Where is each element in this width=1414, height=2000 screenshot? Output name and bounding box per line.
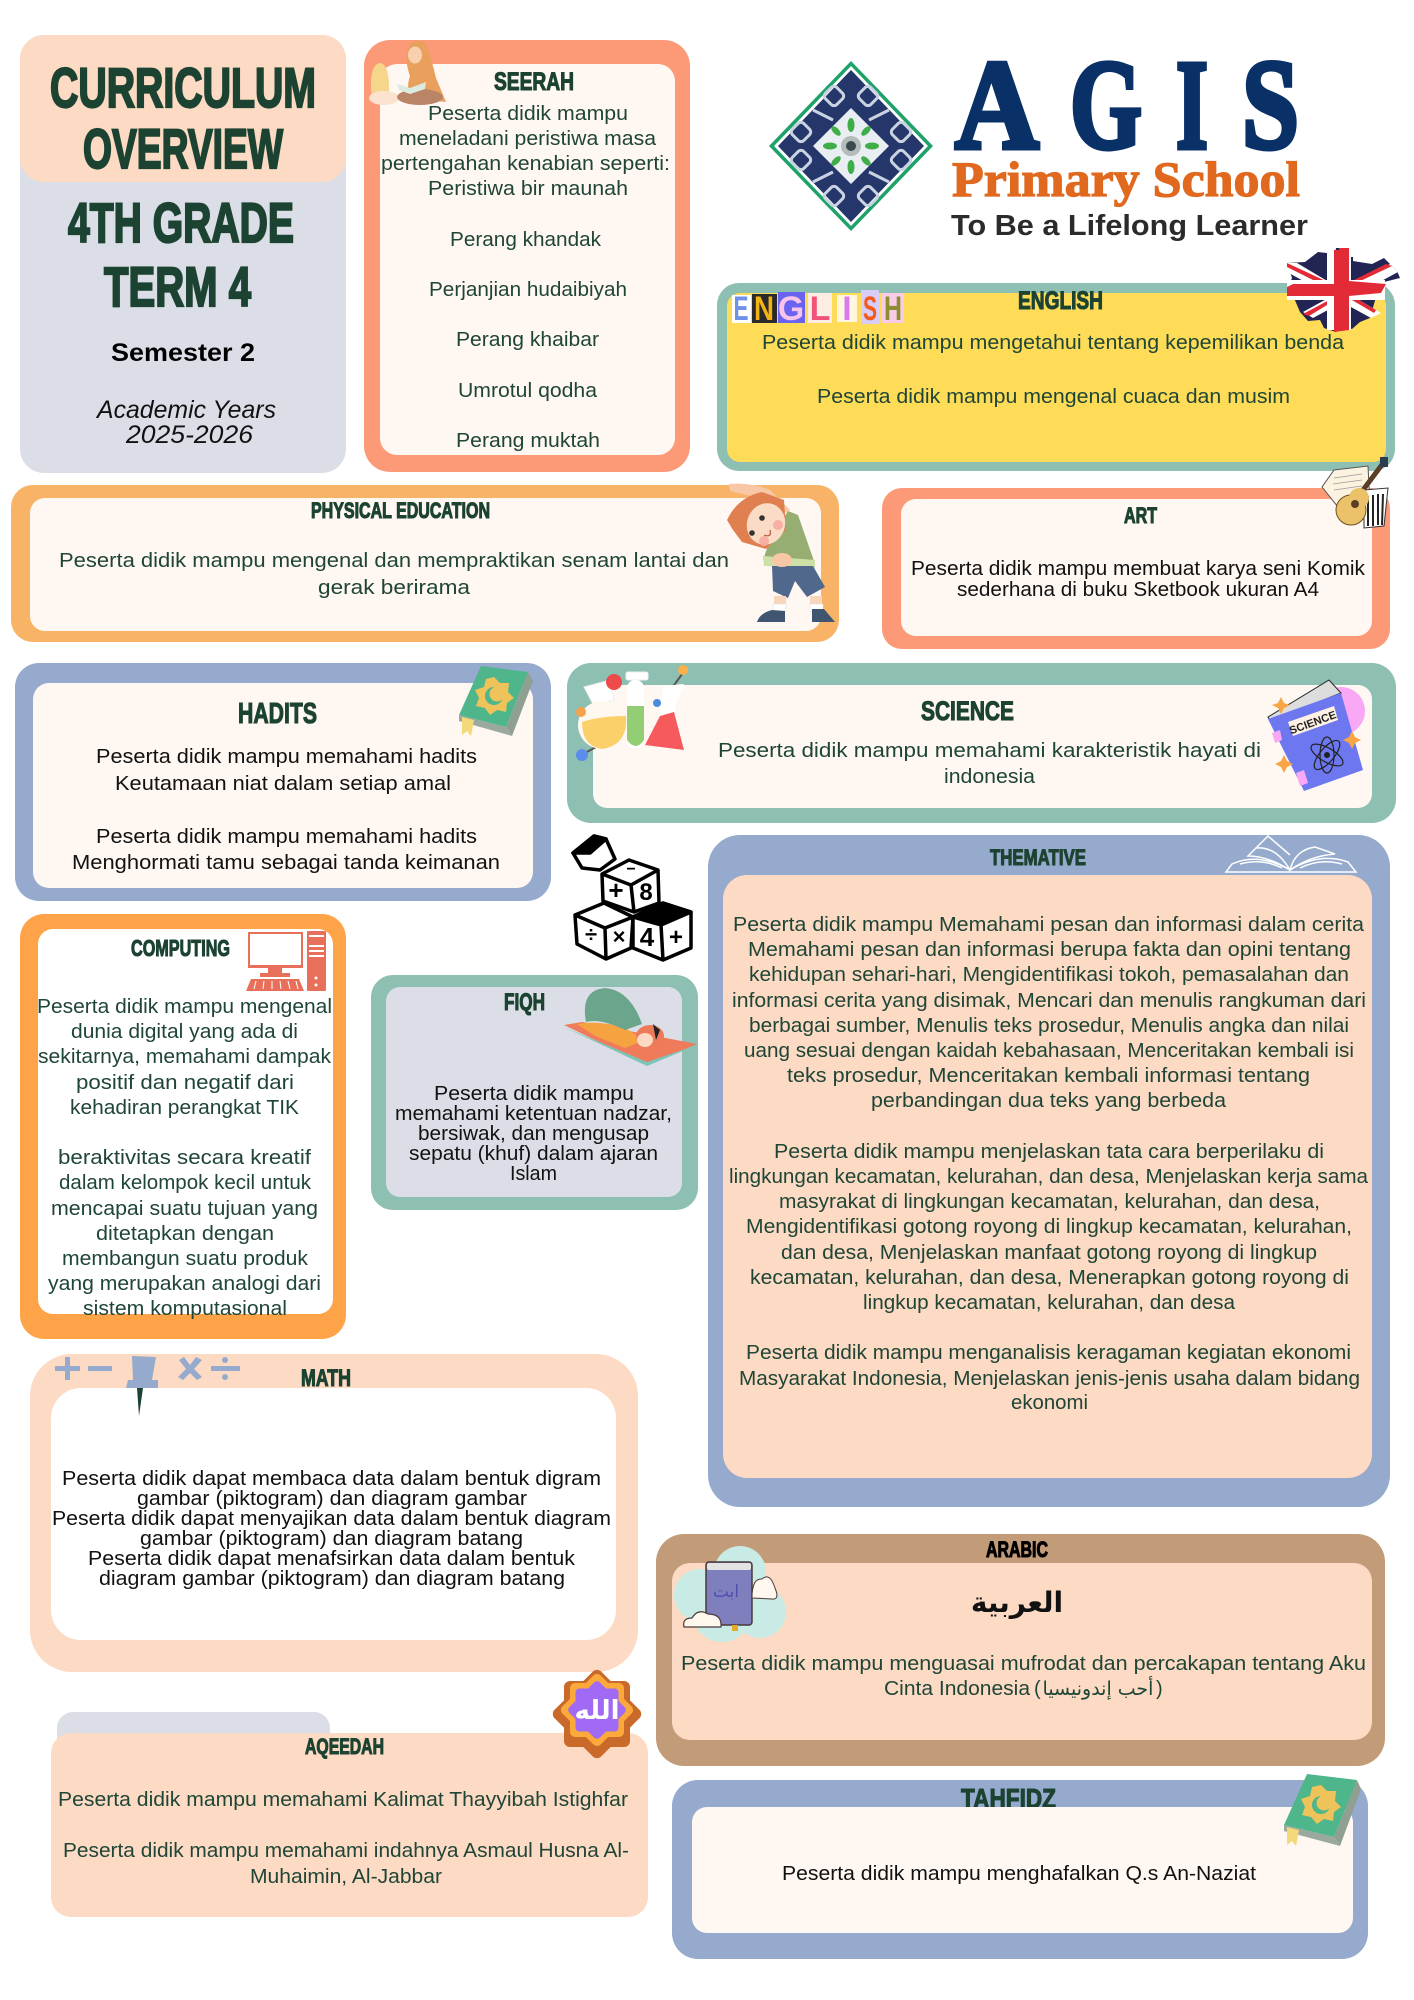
icon: math dice blocks: +: [608, 875, 624, 905]
text: AGIS: S: [1242, 34, 1299, 176]
text: aqeedah objectives: Peserta didik mampu memahami Kalimat Thayyibah Istighfar: [58, 1789, 628, 1811]
text: aqeedah objectives: Muhaimin, Al-Jabbar: [250, 1866, 442, 1888]
panel: title: [20, 35, 346, 473]
text: math objectives: Peserta didik dapat menafsirkan data dalam bentuk: [88, 1548, 576, 1570]
text: computing objectives: dunia digital yang ada di: [71, 1021, 298, 1043]
text: thematic objectives: ekonomi: [1011, 1392, 1088, 1414]
icon: math dice blocks: ÷: [585, 922, 597, 947]
text: physical education objective: gerak berirama: [318, 577, 471, 599]
icon: allah star badge: الله: [574, 1696, 620, 1726]
heading: curriculum overview: CURRICULUM: [50, 56, 316, 119]
text: arabic objective: [681, 1653, 1366, 1701]
icon: english letter collage: L: [810, 290, 830, 328]
heading: math: MATH: [301, 1365, 351, 1392]
icon: guitar and music sheets: [1322, 457, 1388, 528]
icon: english letter collage: S: [863, 290, 877, 328]
text: seerah objectives: Peristiwa bir maunah: [428, 178, 628, 200]
icon: math symbols: [55, 1357, 240, 1380]
panel: aqeedah: [51, 1667, 648, 1917]
text: math objectives: gambar (piktogram) dan diagram gambar: [137, 1488, 527, 1510]
text: fiqh objective: Peserta didik mampu: [434, 1083, 634, 1105]
heading: arabic: ARABIC: [986, 1537, 1048, 1562]
text: thematic objectives: kehidupan sehari-hari, Mengidentifikasi tokoh, pemasalahan dan: [749, 964, 1349, 986]
text: hadits objectives: Peserta didik mampu memahami hadits: [96, 746, 477, 768]
heading: curriculum overview: [50, 56, 316, 180]
text: english objectives: Peserta didik mampu mengetahui tentang kepemilikan benda: [762, 332, 1345, 354]
text: thematic objectives: uang sesuai dengan kaidah kebahasaan, Menceritakan kembali isi: [744, 1040, 1354, 1062]
text: thematic objectives: Peserta didik mampu menganalisis keragaman kegiatan ekonomi: [746, 1342, 1351, 1364]
text: fiqh objective: Islam: [510, 1163, 557, 1185]
text: computing objectives: ditetapkan dengan: [96, 1223, 274, 1245]
text: thematic objectives: Peserta didik mampu menjelaskan tata cara berperilaku di: [774, 1141, 1324, 1163]
text: tagline: To Be a Lifelong Learner: [951, 210, 1308, 242]
text: aqeedah objectives: Peserta didik mampu memahami indahnya Asmaul Husna Al-: [63, 1840, 629, 1862]
heading: fiqh: FIQH: [504, 989, 545, 1016]
icon: arabic book in clouds: ابت: [713, 1582, 739, 1602]
text: seerah objectives: [381, 103, 670, 452]
logo: AGIS Primary School: [769, 34, 1308, 242]
text: aqeedah objectives: [58, 1789, 629, 1888]
icon: english letter collage: H: [884, 290, 902, 328]
text: english objectives: [762, 332, 1345, 408]
panel: art: [882, 457, 1390, 649]
icon: science book: SCIENCE: [1288, 709, 1338, 737]
text: hadits objectives: Menghormati tamu sebagai tanda keimanan: [72, 852, 500, 874]
text: arabic objective: Peserta didik mampu menguasai mufrodat dan percakapan tentang Aku: [681, 1653, 1366, 1675]
text: seerah objectives: Perang khaibar: [456, 329, 599, 351]
icon: push pin: [126, 1356, 158, 1416]
text: physical education objective: Peserta didik mampu mengenal dan mempraktikan senam lantai dan: [59, 550, 729, 572]
icon: english letter collage: I: [842, 290, 852, 328]
icon: open book outline: [1226, 836, 1356, 872]
text: thematic objectives: dan desa, Menjelaskan manfaat gotong royong di lingkup: [781, 1242, 1317, 1264]
text: seerah objectives: Peserta didik mampu: [428, 103, 628, 125]
text: art objective: sederhana di buku Sketbook ukuran A4: [957, 579, 1319, 601]
icon: science book: [1268, 680, 1365, 791]
text: computing objectives: yang merupakan analogi dari: [48, 1273, 321, 1295]
icon: math dice blocks: 8: [639, 879, 653, 906]
icon: english letter collage: G: [778, 290, 804, 328]
text: AGIS: I: [1176, 34, 1208, 176]
heading: curriculum overview: OVERVIEW: [83, 117, 283, 180]
heading: seerah: SEERAH: [494, 68, 574, 96]
panel: physical education: [11, 484, 839, 642]
text: thematic objectives: berbagai sumber, Menulis teks prosedur, Menulis angka dan nilai: [749, 1015, 1349, 1037]
heading: grade and term: 4TH GRADE: [68, 191, 294, 254]
text: computing objectives: positif dan negatif dari: [76, 1072, 294, 1094]
text: computing objectives: sistem komputasional: [83, 1298, 287, 1320]
text: computing objectives: beraktivitas secara kreatif: [58, 1147, 311, 1169]
icon: english letter collage: [732, 290, 904, 328]
panel: thematic: [708, 835, 1390, 1507]
text: academic years: [95, 396, 276, 449]
text: computing objectives: Peserta didik mampu mengenal: [37, 996, 332, 1018]
text: computing objectives: membangun suatu produk: [62, 1248, 309, 1270]
text: english objectives: Peserta didik mampu mengenal cuaca dan musim: [817, 386, 1290, 408]
icon: lab flasks: [576, 665, 688, 761]
text: AGIS: [955, 34, 1299, 176]
icon: mother and child reading: [369, 41, 446, 105]
icon: math dice blocks: 4: [640, 922, 655, 952]
text: academic years: 2025-2026: [125, 421, 253, 449]
heading: science: SCIENCE: [921, 696, 1014, 726]
panel: tahfidz: [672, 1774, 1368, 1959]
text: seerah objectives: Perang khandak: [450, 229, 602, 251]
panel: math: [30, 1354, 638, 1672]
panel: hadits: [15, 663, 551, 901]
text: thematic objectives: informasi cerita yang disimak, Mencari dan menulis rangkuman dari: [732, 990, 1366, 1012]
text: fiqh objective: bersiwak, dan mengusap: [418, 1123, 649, 1145]
heading: english: ENGLISH: [1018, 287, 1103, 315]
icon: math dice blocks: [573, 836, 691, 960]
icon: math dice blocks: ×: [613, 924, 625, 949]
heading: thematic: THEMATIVE: [990, 845, 1086, 870]
text: hadits objectives: [72, 746, 500, 874]
text: thematic objectives: Memahami pesan dan informasi berupa fakta dan opini tentang: [748, 939, 1351, 961]
icon: english letter collage: N: [754, 290, 774, 328]
heading: grade and term: [68, 191, 294, 318]
icon: quran book: [459, 666, 533, 736]
panel: arabic: [656, 1534, 1385, 1766]
text: AGIS: G: [1070, 34, 1142, 176]
text: thematic objectives: [729, 914, 1369, 1414]
icon: union jack map: [1287, 248, 1400, 332]
text: computing objectives: [37, 996, 332, 1320]
panel: fiqh: [371, 975, 698, 1210]
text: math objectives: Peserta didik dapat menyajikan data dalam bentuk diagram: [52, 1508, 611, 1530]
text: tahfidz objective: Peserta didik mampu menghafalkan Q.s An-Naziat: [782, 1863, 1256, 1885]
icon: diamond emblem: [769, 61, 933, 231]
text: academic years: Academic Years: [95, 396, 276, 424]
text: hadits objectives: Keutamaan niat dalam setiap amal: [115, 773, 451, 795]
panel: english: [717, 248, 1400, 471]
text: thematic objectives: perbandingan dua teks yang berbeda: [871, 1090, 1227, 1112]
text: thematic objectives: Masyarakat Indonesia, Menjelaskan jenis-jenis usaha dalam bidang: [739, 1368, 1360, 1390]
text: thematic objectives: kecamatan, kelurahan, dan desa, Menerapkan gotong royong di: [750, 1267, 1349, 1289]
text: semester: Semester 2: [111, 339, 255, 367]
text: math objectives: [52, 1468, 611, 1590]
text: fiqh objective: sepatu (khuf) dalam ajaran: [409, 1143, 658, 1165]
text: Primary School: Primary School: [952, 151, 1300, 207]
text: fiqh objective: [395, 1083, 672, 1185]
text: arabic objective: Cinta Indonesia: [884, 1678, 1031, 1700]
heading: hadits: HADITS: [238, 698, 317, 730]
text: math objectives: diagram gambar (piktogram) dan diagram batang: [99, 1568, 565, 1590]
icon: allah star badge: [550, 1667, 644, 1761]
panel: seerah: [364, 40, 690, 472]
text: fiqh objective: memahami ketentuan nadzar,: [395, 1103, 672, 1125]
text: science objective: indonesia: [944, 766, 1036, 788]
icon: math dice blocks: +: [669, 924, 683, 951]
heading: aqeedah: AQEEDAH: [305, 1734, 384, 1759]
text: hadits objectives: Peserta didik mampu memahami hadits: [96, 826, 477, 848]
text: physical education objective: [59, 550, 729, 599]
text: arabic script title: العربية: [971, 1586, 1063, 1619]
heading: grade and term: TERM 4: [104, 255, 251, 318]
text: computing objectives: mencapai suatu tujuan yang: [51, 1198, 318, 1220]
icon: english letter collage: E: [734, 290, 748, 328]
icon: desktop computer: [246, 931, 326, 991]
icon: person prostrating on mat: [564, 988, 697, 1066]
text: AGIS: A: [955, 34, 1039, 176]
text: thematic objectives: masyrakat di lingkungan kecamatan, kelurahan, dan desa,: [779, 1191, 1320, 1213]
panel: computing: [20, 914, 346, 1339]
icon: arabic book in clouds: [674, 1546, 786, 1642]
text: computing objectives: dalam kelompok kecil untuk: [59, 1172, 312, 1194]
text: seerah objectives: Umrotul qodha: [458, 380, 598, 402]
text: art objective: Peserta didik mampu membuat karya seni Komik: [911, 558, 1366, 580]
heading: physical education: PHYSICAL EDUCATION: [311, 498, 490, 523]
text: thematic objectives: lingkungan kecamatan, kelurahan, dan desa, Menjelaskan kerja sama: [729, 1166, 1369, 1188]
text: seerah objectives: pertengahan kenabian seperti:: [381, 153, 670, 175]
text: arabic objective: أحب إندونيسيا: [1043, 1676, 1153, 1701]
text: thematic objectives: Peserta didik mampu Memahami pesan dan informasi dalam cerita: [733, 914, 1365, 936]
text: arabic objective: (: [1034, 1678, 1041, 1700]
text: thematic objectives: teks prosedur, Menceritakan kembali informasi tentang: [787, 1065, 1310, 1087]
text: thematic objectives: Mengidentifikasi gotong royong di lingkup kecamatan, kelurahan,: [746, 1216, 1352, 1238]
text: arabic objective: ): [1156, 1678, 1163, 1700]
text: science objective: [718, 740, 1261, 788]
text: computing objectives: kehadiran perangkat TIK: [70, 1097, 300, 1119]
panel: science: [567, 663, 1396, 823]
text: art objective: [911, 558, 1366, 601]
text: seerah objectives: meneladani peristiwa masa: [399, 128, 657, 150]
text: math objectives: gambar (piktogram) dan diagram batang: [140, 1528, 523, 1550]
text: thematic objectives: lingkup kecamatan, kelurahan, dan desa: [863, 1292, 1236, 1314]
heading: art: ART: [1124, 503, 1157, 528]
text: computing objectives: sekitarnya, memahami dampak: [38, 1046, 332, 1068]
text: seerah objectives: Perjanjian hudaibiyah: [429, 279, 627, 301]
heading: tahfidz: TAHFIDZ: [961, 1783, 1056, 1814]
text: math objectives: Peserta didik dapat membaca data dalam bentuk digram: [62, 1468, 601, 1490]
icon: quran book: [1284, 1774, 1361, 1846]
text: seerah objectives: Perang muktah: [456, 430, 600, 452]
text: science objective: Peserta didik mampu memahami karakteristik hayati di: [718, 740, 1261, 762]
heading: computing: COMPUTING: [131, 935, 230, 961]
icon: math dice blocks: −: [626, 861, 636, 878]
icon: stretching child: [727, 484, 835, 622]
